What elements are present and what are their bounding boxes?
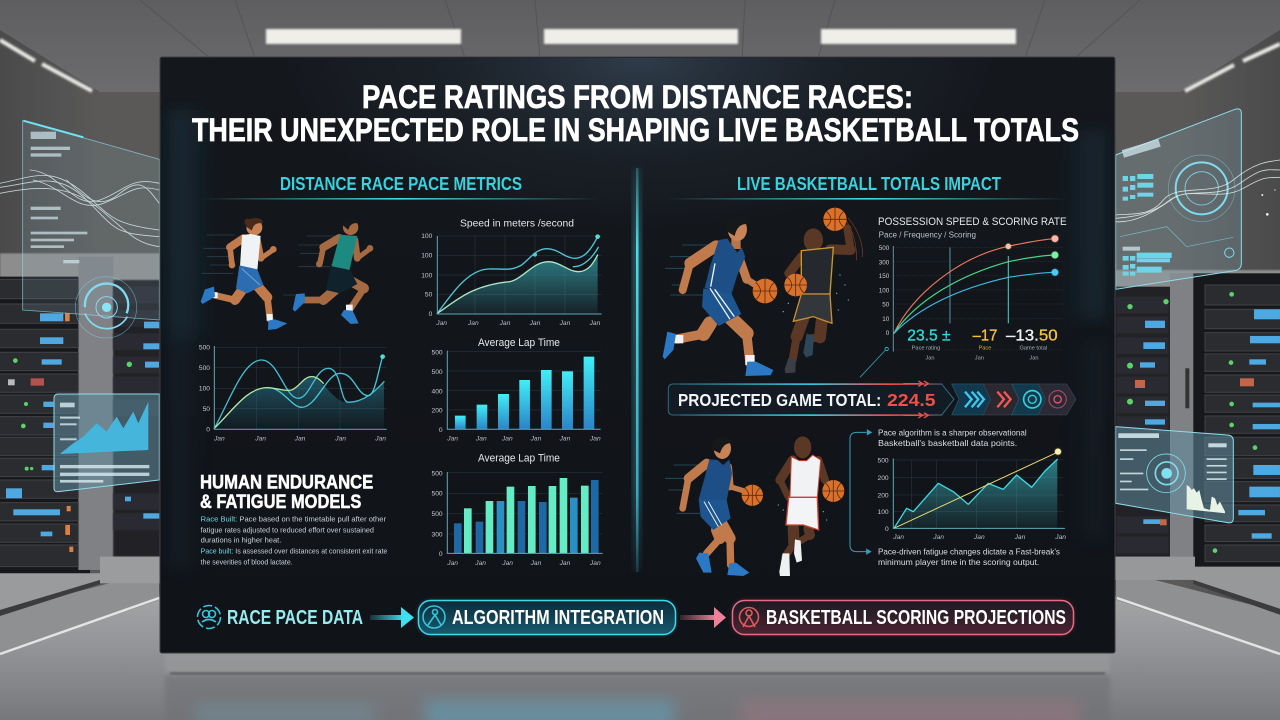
bar chart: average lap time grouped: Jan [501,560,513,567]
chart: possession speed and scoring rate: Pace [979,345,991,351]
chart: possession speed and scoring rate: 10 [882,316,890,323]
bar chart: average lap time grouped: Jan [474,560,486,567]
bar chart: average lap time: Jan [559,435,571,442]
icon: player in white uniform [778,436,844,576]
icon: basketball player dribbling in blue [663,217,777,376]
text block: algorithm note: Pace algorithm is a sharper observational [878,427,1027,437]
chart: possession speed and scoring rate: 50 [882,302,890,309]
line chart: pace waves: 500 [199,344,210,351]
bar chart: average lap time: 200 [432,408,443,415]
heading: live basketball totals impact: LIVE BASKETBALL TOTALS IMPACT [737,174,1001,194]
chart: possession speed and scoring rate: 150 [879,273,890,280]
bar chart: average lap time: Average Lap Time [478,337,560,349]
hologram: lower left chart sheet [54,394,159,492]
line chart: speed in meters per second: 100 [421,233,433,240]
line chart: speed in meters per second: Jan [529,320,541,327]
line chart: pace waves [199,344,387,442]
chart: pace algorithm trend: Jan [892,534,904,541]
text block: fatigue description: the severities of blood lactate. [201,557,293,566]
floor [0,596,1280,720]
flow: algorithm integration: ALGORITHM INTEGRATION [452,607,664,629]
bar chart: average lap time grouped: Jan [559,560,571,567]
line chart: speed in meters per second: Jan [467,320,479,327]
bar chart: average lap time: Jan [475,435,487,442]
chart: possession speed and scoring rate [860,216,1067,377]
bar chart: average lap time grouped: Jan [446,560,458,567]
text block: fatigue description: Race Built: Pace based on the timetable pull after other [201,515,386,524]
line chart: speed in meters per second: 50 [425,292,433,299]
line chart: pace waves: 0 [206,426,210,433]
bar chart: average lap time: 500 [432,369,443,376]
line chart: speed in meters per second: 100 [421,272,433,279]
text block: algorithm note [878,427,1027,448]
line chart: pace waves: Jan [213,435,225,442]
right column lower graphics [665,427,1066,576]
chart: pace algorithm trend: Jan [1054,534,1066,541]
chart: possession speed and scoring rate: Jan [925,356,935,362]
line chart: pace waves: 500 [199,365,210,372]
bar chart: average lap time: Jan [501,435,513,442]
text block: fatigue description [201,515,387,566]
chart: pace algorithm trend: 100 [878,509,889,516]
ceiling lights [0,29,1280,91]
chart: possession speed and scoring rate: 300 [879,259,890,266]
chart: pace algorithm trend: 200 [878,475,889,482]
chart: possession speed and scoring rate: 500 [879,245,890,252]
line chart: speed in meters per second [421,218,602,327]
heading: human endurance and fatigue models [200,472,373,513]
text block: fatigue note: minimum player time in the scoring output. [878,557,1039,567]
bar chart: average lap time grouped: 0 [439,551,443,558]
flow: race pace data [198,606,363,629]
text block: fatigue description: Pace built: Is assessed over distances at consistent exit rate [201,547,387,556]
text block: fatigue note [878,546,1060,567]
text block: algorithm note: Basketball's basketball data points. [878,438,1017,448]
icon: basketball player in black jersey [783,208,863,373]
chart: pace algorithm trend: 500 [878,458,889,465]
flow: basketball scoring projections: BASKETBALL SCORING PROJECTIONS [766,607,1066,629]
line chart: pace waves: 50 [203,406,210,413]
bar chart: average lap time: Jan [530,435,542,442]
chart: possession speed and scoring rate: POSSESSION SPEED & SCORING RATE [878,216,1067,228]
floor shadow and reflections [165,653,1110,720]
left column graphics [199,218,602,442]
chart: possession speed and scoring rate: –17 [973,327,997,344]
ceiling [0,0,1280,92]
arrow: data to algorithm [370,607,414,628]
flow: basketball scoring projections [732,600,1074,634]
bar chart: average lap time: Jan [589,435,601,442]
bracket arrows [850,430,871,554]
hologram panels right [1116,109,1280,523]
icon strip: chevrons and badges [952,384,1076,415]
main dark panel [160,0,1115,653]
center divider [632,168,642,572]
server racks right [1115,270,1280,616]
arrow: algorithm to projections [680,607,726,628]
bar chart: average lap time: 400 [432,388,443,395]
bar chart: average lap time grouped: Jan [589,560,601,567]
bar chart: average lap time grouped: Jan [530,560,542,567]
line chart: speed in meters per second: 100 [421,253,433,260]
line chart: speed in meters per second: 0 [429,311,433,318]
text block: fatigue description: fatigue rates adjusted to reduced effort over sustained [201,525,374,534]
hologram panels left [0,121,159,492]
chart: possession speed and scoring rate: 23.5 ± [907,327,951,344]
line chart: speed in meters per second: Jan [559,320,571,327]
server racks left [0,253,160,616]
text block: fatigue note: Pace-driven fatigue changes dictate a Fast-break's [878,546,1060,556]
bar chart: average lap time: 0 [439,427,443,434]
flow: race pace data: RACE PACE DATA [227,607,363,629]
line chart: pace waves: Jan [374,435,386,442]
title: THEIR UNEXPECTED ROLE IN SHAPING LIVE BASKETBALL TOTALS [192,112,1079,148]
hologram: target ring [75,277,137,338]
chart: possession speed and scoring rate: Pace rating [912,345,940,351]
line chart: speed in meters per second: Jan [589,320,601,327]
chart: pace algorithm trend: 200 [878,492,889,499]
callout: projected game total [668,381,954,418]
icon: runner in teal singlet [283,218,373,324]
chart: pace algorithm trend: Jan [973,534,985,541]
bar chart: average lap time grouped: Average Lap Time [478,453,560,465]
callout: projected game total: PROJECTED GAME TOTAL: [678,390,881,410]
flow: algorithm integration [418,600,676,634]
line chart: speed in meters per second: Jan [435,320,447,327]
heading: human endurance and fatigue models: & FATIGUE MODELS [200,492,361,513]
bar chart: average lap time: 500 [432,350,443,357]
chart: possession speed and scoring rate: Game total [1019,345,1047,351]
chart: pace algorithm trend: Jan [1014,534,1026,541]
lower left column [200,453,603,567]
bar chart: average lap time [432,337,601,442]
line chart: pace waves: Jan [294,435,306,442]
line chart: speed in meters per second: Speed in meters /second [460,218,574,229]
hologram: lower right sheet [1116,427,1233,523]
bar chart: average lap time grouped: 300 [432,531,443,538]
hologram: upper right data sheet [1116,109,1280,289]
chart: pace algorithm trend: Jan [932,534,944,541]
icon: player in blue dribbling [665,437,763,576]
icon: runner in white tank [201,218,287,330]
chart: possession speed and scoring rate: Jan [975,356,984,362]
bar chart: average lap time grouped [432,453,603,567]
bar chart: average lap time grouped: 500 [432,491,443,498]
line chart: pace waves: Jan [334,435,346,442]
hologram: upper left data sheet [0,121,159,320]
chart: possession speed and scoring rate: Jan [1029,356,1039,362]
chart: possession speed and scoring rate: Pace / Frequency / Scoring [879,230,976,239]
bar chart: average lap time grouped: 500 [432,511,443,518]
title [192,79,1079,148]
bar chart: average lap time: Jan [446,435,458,442]
line chart: pace waves: 100 [199,385,210,392]
text block: fatigue description: durations in higher heat. [201,535,281,544]
chart: possession speed and scoring rate: –13.50 [1006,327,1058,344]
right column upper graphics [663,208,1076,418]
chart: pace algorithm trend: 0 [885,526,889,533]
heading: human endurance and fatigue models: HUMAN ENDURANCE [200,472,373,493]
chart: possession speed and scoring rate: 0 [886,330,890,337]
callout: projected game total: 224.5 [887,390,936,410]
line chart: speed in meters per second: Jan [499,320,511,327]
bar chart: average lap time grouped: 500 [432,471,443,478]
chart: pace algorithm trend [878,449,1066,541]
heading: distance race pace metrics: DISTANCE RACE PACE METRICS [280,174,522,194]
line chart: pace waves: Jan [254,435,266,442]
title: PACE RATINGS FROM DISTANCE RACES: [362,79,913,115]
chart: possession speed and scoring rate: 100 [879,287,890,294]
